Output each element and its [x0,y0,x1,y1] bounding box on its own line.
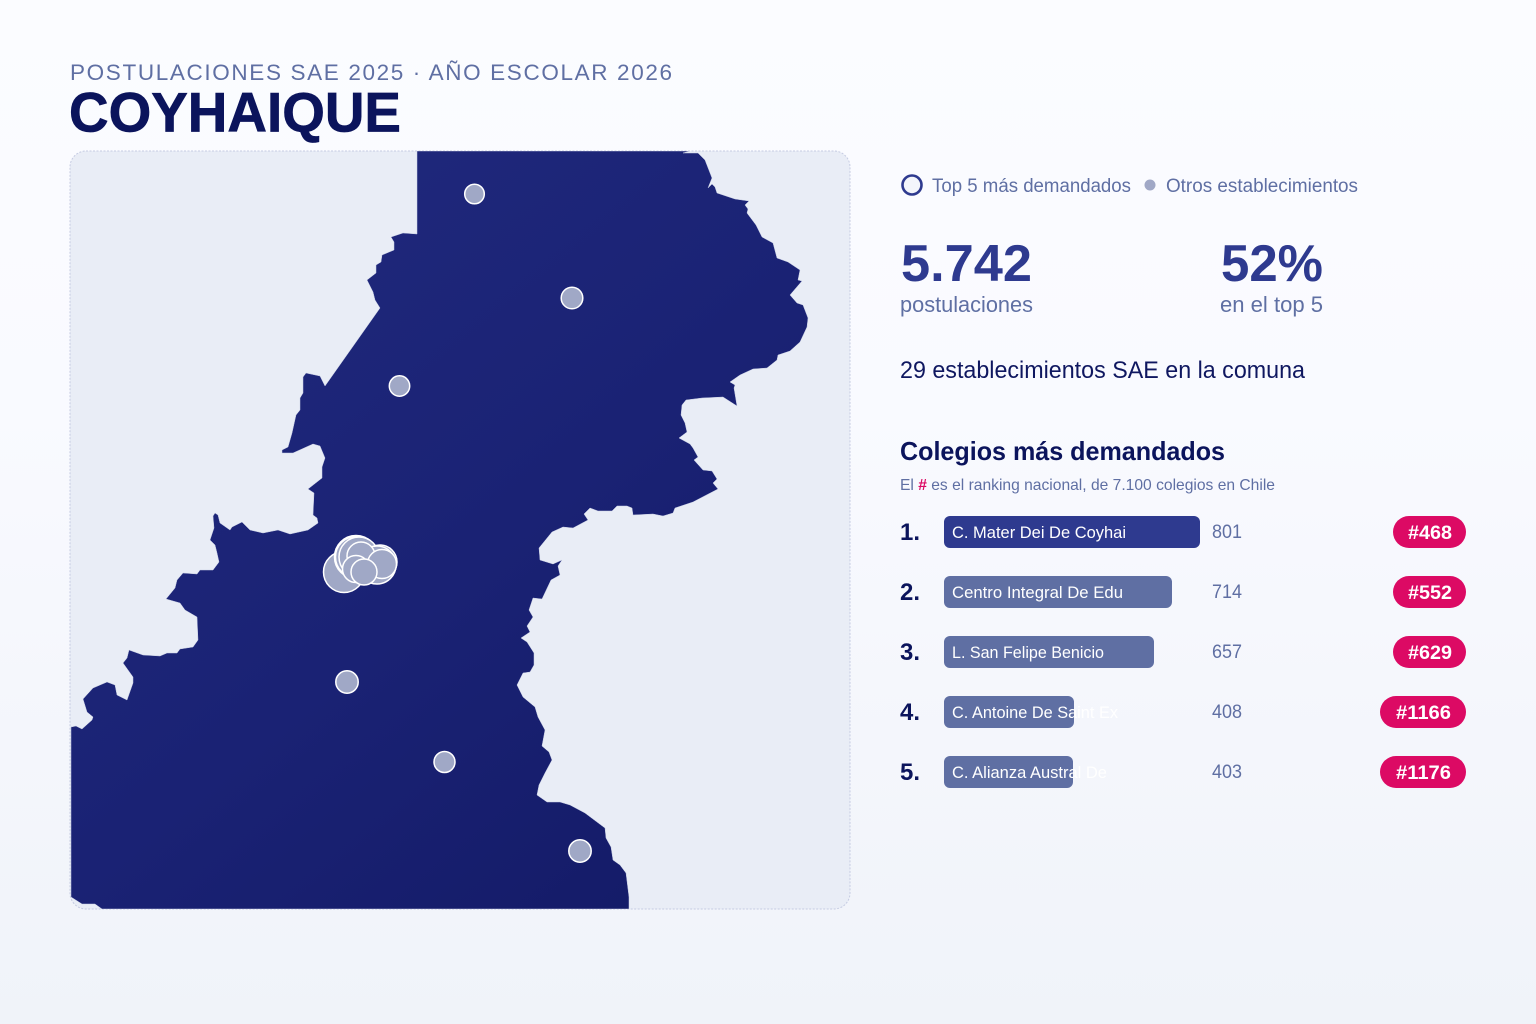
row 1 [900,516,1466,548]
central cluster markers [324,536,397,592]
stat: top 5 share [1220,235,1323,317]
caption: postulaciones [900,292,1033,317]
ranking list [900,516,1466,788]
row 3: L. San Felipe Benicio [952,643,1104,662]
row 5: 403 [1212,762,1242,783]
value: 52% [1221,235,1323,293]
row 1: C. Mater Dei De Coyhai [952,523,1126,542]
stat: applications [900,235,1033,317]
row 4: C. Antoine De Saint Ex [952,703,1118,722]
row 3: 3. [900,639,920,666]
row 1: 801 [1212,522,1242,543]
caption: en el top 5 [1220,292,1323,317]
row 1: #468 [1408,523,1452,544]
commune shape [71,151,808,909]
legend label: others: Otros establecimientos [1166,176,1358,197]
infographic canvas [70,60,1466,910]
header [69,60,672,144]
value: 5.742 [901,235,1032,293]
subtitle: POSTULACIONES SAE 2025 · AÑO ESCOLAR 2026 [70,60,672,85]
row 5: 5. [900,759,920,786]
row 1: 1. [900,519,920,546]
ranking note: El # es el ranking nacional, de 7.100 colegios en Chile [900,477,1275,494]
row 5 [900,756,1466,788]
map background [70,151,850,909]
establishments count: 29 establecimientos SAE en la comuna [900,357,1306,384]
row 2: Centro Integral De Edu [952,583,1123,602]
row 2: 714 [1212,582,1242,603]
row 5: C. Alianza Austral De [952,763,1107,782]
row 4: 408 [1212,702,1242,723]
row 4: #1166 [1396,703,1451,724]
row 3: 657 [1212,642,1242,663]
row 3: #629 [1408,643,1452,664]
row 4 [900,696,1466,728]
legend [902,176,1358,197]
row 5: #1176 [1396,763,1451,784]
icon: other dot [1144,180,1156,190]
row 3 [900,636,1466,668]
icon: top 5 ring [902,176,922,194]
row 2: 2. [900,579,920,606]
title: COYHAIQUE [69,80,401,144]
row 2 [900,576,1466,608]
row 4: 4. [900,699,920,726]
other schools markers [336,184,591,862]
ranking heading: Colegios más demandados [900,436,1225,466]
row 2: #552 [1408,583,1452,604]
panel: map [70,151,850,909]
legend label: top 5: Top 5 más demandados [932,176,1131,197]
